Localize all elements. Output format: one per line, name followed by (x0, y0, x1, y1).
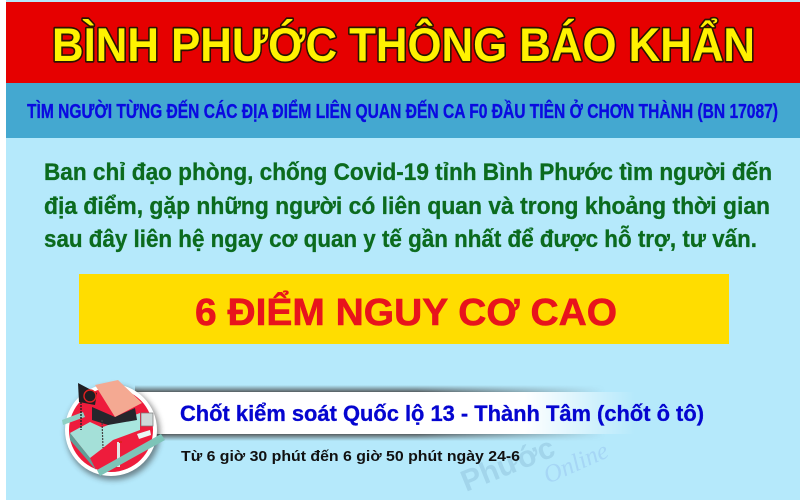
icon: checkpoint (62, 380, 165, 480)
panel: red title band (6, 2, 800, 83)
location name: Chốt kiểm soát Quốc lộ 13 - Thành Tâm (chốt ô tô) (180, 401, 704, 426)
title bar (135, 385, 635, 441)
location row 1 (62, 380, 704, 480)
panel: blue subtitle band (6, 83, 800, 138)
banner: 6 high-risk points (79, 274, 729, 344)
time: Từ 6 giờ 30 phút đến 6 giờ 50 phút ngày 24-6 (181, 448, 520, 465)
watermark: Online (539, 437, 613, 489)
watermark (456, 431, 613, 498)
intro paragraph: địa điểm, gặp những người có liên quan và trong khoảng thời gian (44, 193, 770, 220)
watermark: Phước (456, 431, 560, 498)
intro paragraph: Ban chỉ đạo phòng, chống Covid-19 tỉnh Bình Phước tìm người đến (44, 159, 772, 186)
title: BÌNH PHƯỚC THÔNG BÁO KHẨN (52, 18, 755, 71)
intro paragraph: sau đây liên hệ ngay cơ quan y tế gần nhất để được hỗ trợ, tư vấn. (44, 225, 757, 253)
intro paragraph (44, 159, 772, 253)
banner heading: 6 ĐIỂM NGUY CƠ CAO (195, 289, 617, 334)
